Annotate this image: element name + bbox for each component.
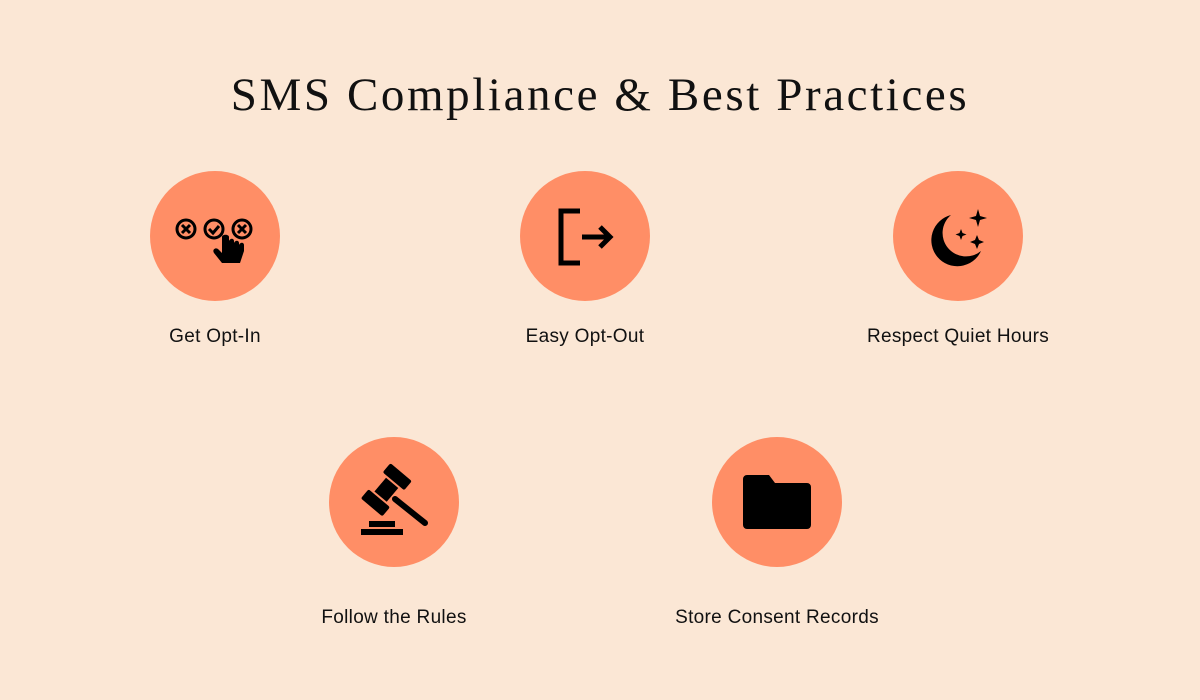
item: Store Consent Records — [675, 437, 879, 628]
icon: gavel — [329, 437, 459, 567]
item: Get Opt-In — [150, 171, 280, 347]
label: Respect Quiet Hours — [867, 326, 1049, 347]
item: Respect Quiet Hours — [867, 171, 1049, 347]
icon: exit arrow — [520, 171, 650, 301]
label: Easy Opt-Out — [526, 326, 644, 347]
title: SMS Compliance & Best Practices — [231, 69, 969, 121]
item: Easy Opt-Out — [520, 171, 650, 347]
label: Store Consent Records — [675, 607, 879, 628]
item: Follow the Rules — [321, 437, 467, 628]
label: Follow the Rules — [321, 607, 467, 628]
label: Get Opt-In — [169, 326, 261, 347]
icon: folder — [712, 437, 842, 567]
icon: moon and stars — [893, 171, 1023, 301]
icon: opt-in checkboxes with hand — [150, 171, 280, 301]
